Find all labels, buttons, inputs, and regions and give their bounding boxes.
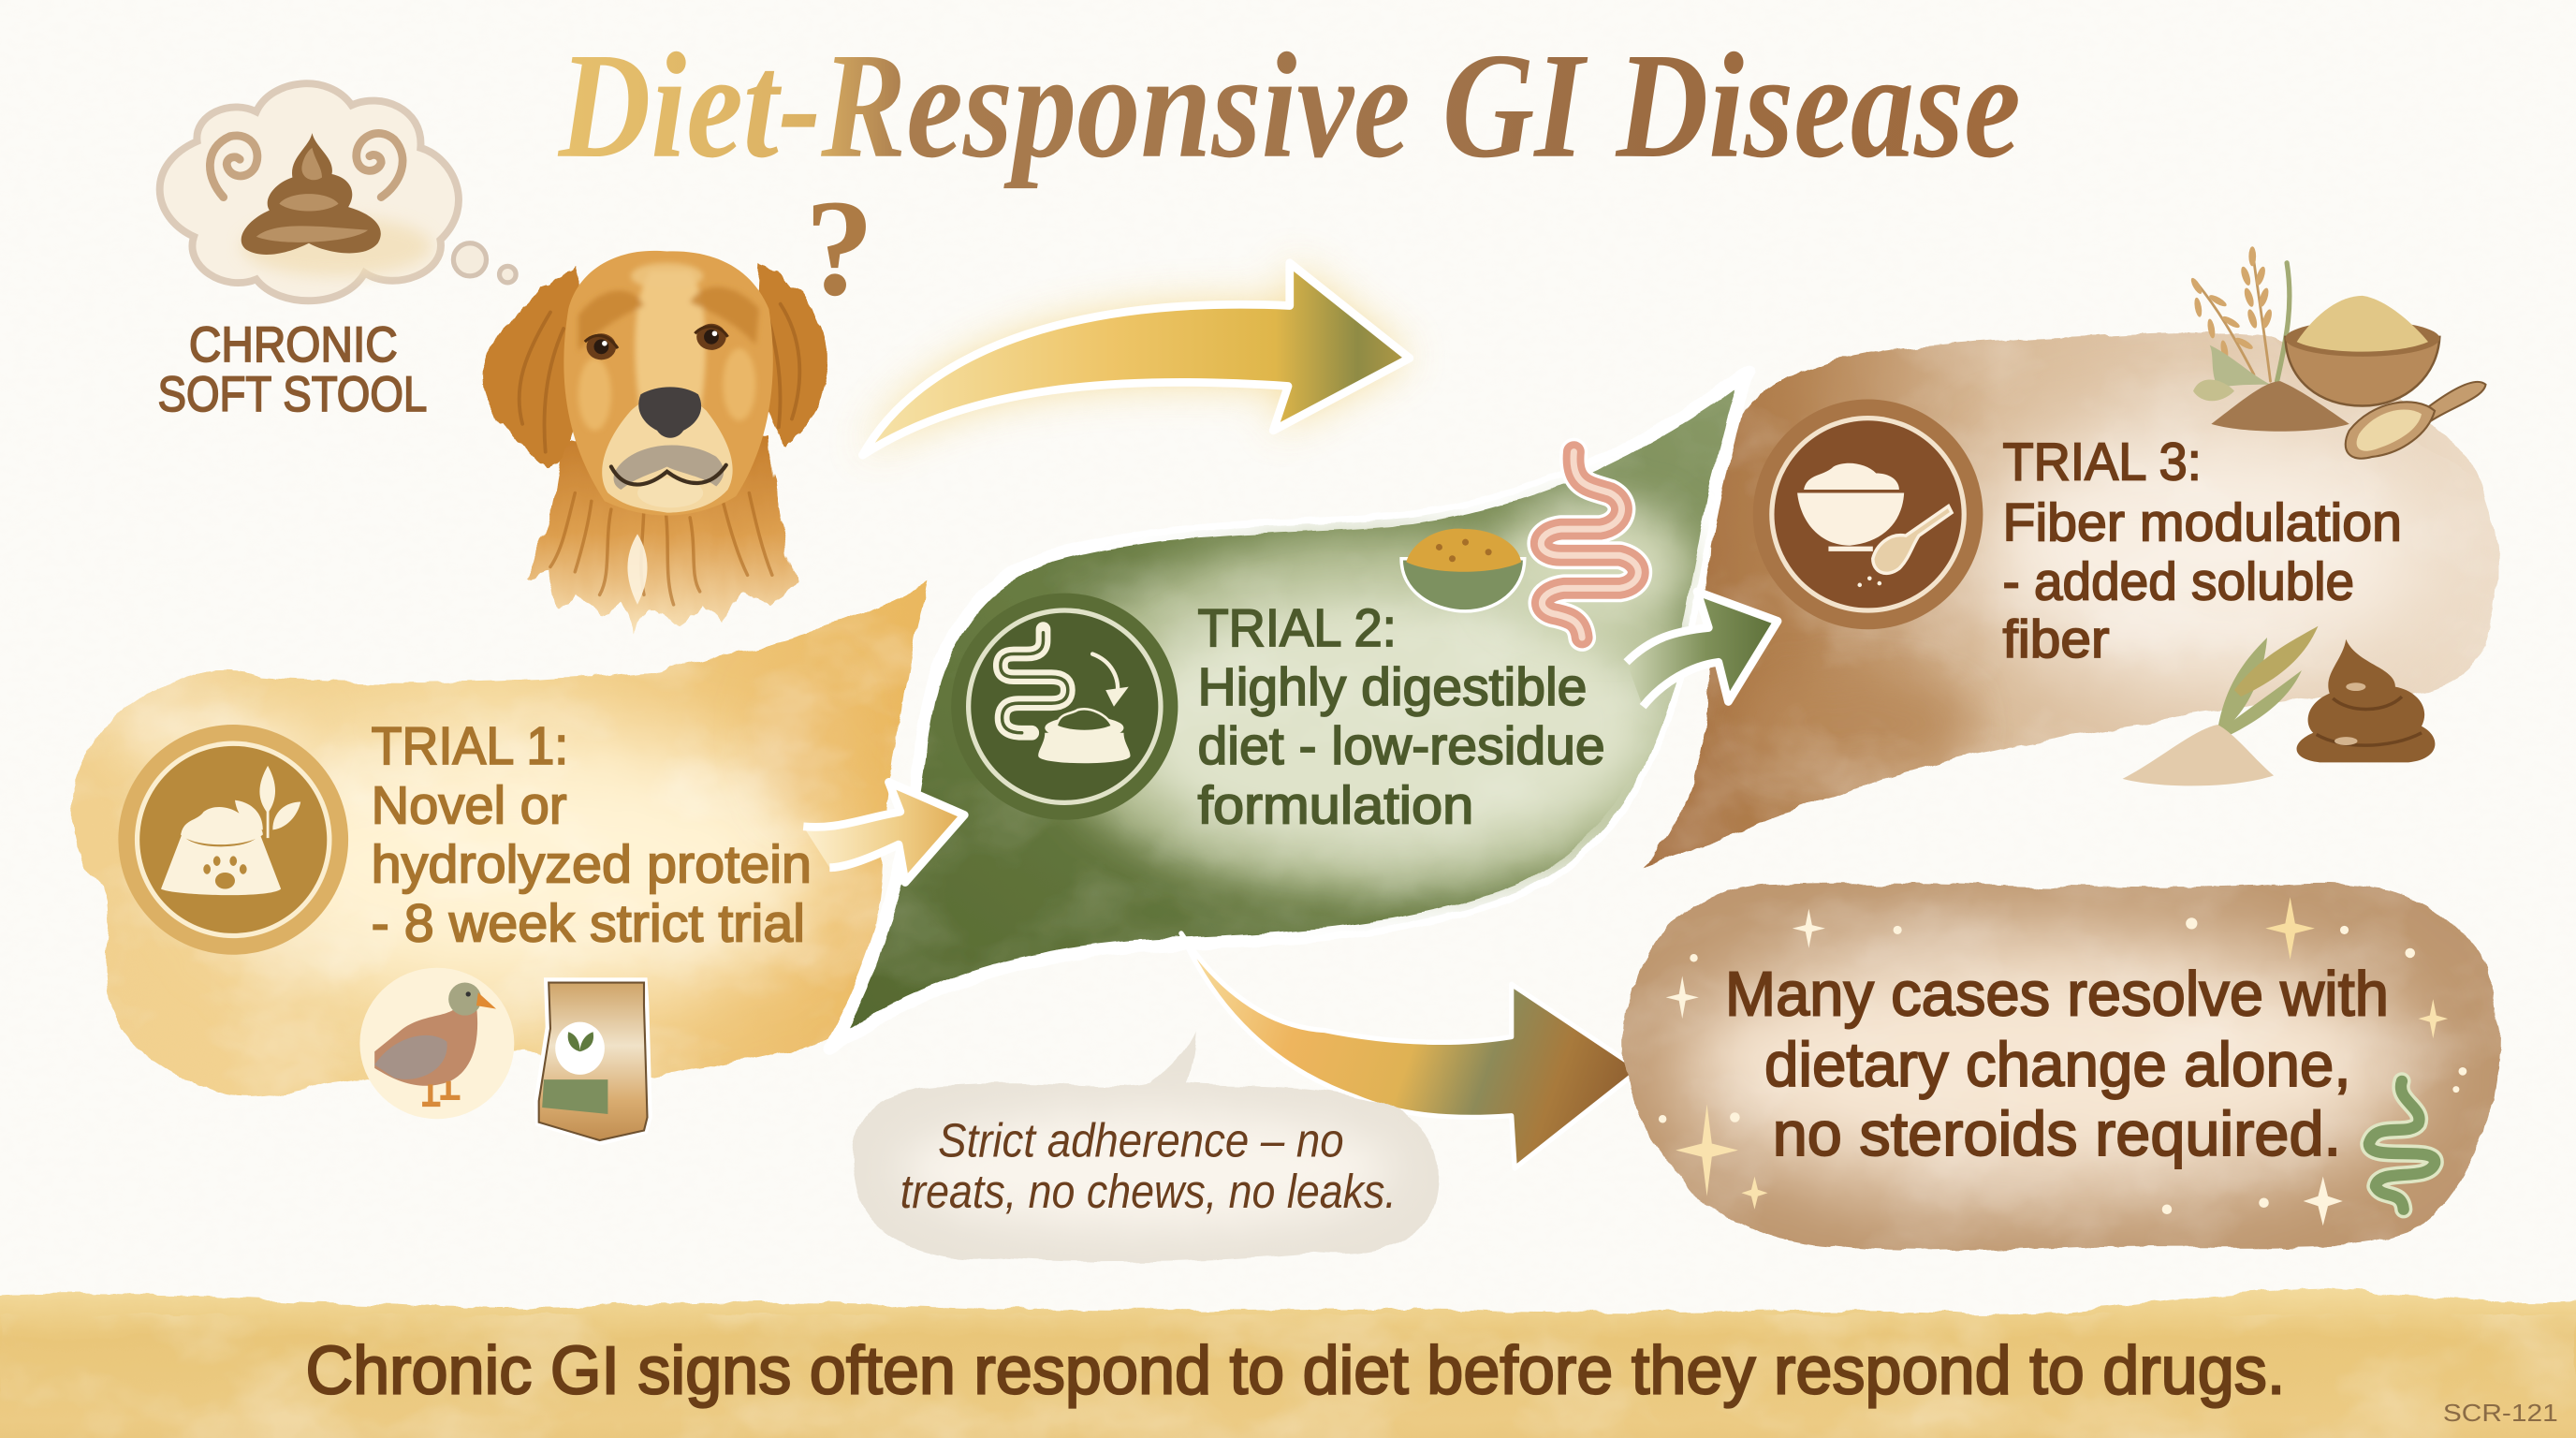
trial 1 wash [66,575,953,1117]
trial 2 wash [822,370,1758,1051]
icon: leaves [2217,626,2318,736]
panel: result [1610,871,2513,1265]
cloud wash [242,217,432,276]
icon: brown fiber pile [2211,381,2349,432]
result text: Many cases resolve with [1725,961,2389,1030]
trial 2 badge [951,594,1178,820]
mouth [611,465,726,485]
ear strokes [520,304,799,452]
trial 1 text: hydrolyzed protein [372,834,812,893]
trial 1 text [372,716,812,953]
chest strokes [550,493,772,605]
icon: duck [359,968,514,1119]
result wash [1610,871,2513,1265]
head [564,251,773,516]
muzzle [602,396,733,513]
icon: stool [2297,639,2435,762]
cloud shape [160,83,459,301]
trial 2 text [1197,598,1605,834]
arrow: trial 1 to trial 2 [803,782,964,882]
source code: SCR-121 [2443,1399,2558,1427]
chest fur [524,435,795,633]
left ear [481,266,581,470]
trial 1 text: TRIAL 1: [372,716,568,775]
label: chronic soft stool: SOFT STOOL [157,367,427,422]
trial 3 text [2002,432,2402,668]
icon: light fiber pile [2123,725,2274,785]
banner wash [0,1290,2576,1438]
note bubble [853,1030,1439,1262]
trial 3 badge [1753,399,1983,629]
banner [0,1290,2576,1438]
arrow: to result [1181,933,1640,1168]
result text: no steroids required. [1773,1100,2341,1169]
trial 1 text: - 8 week strict trial [372,894,805,953]
trial 2 text: Highly digestible [1197,657,1587,716]
sparkles [1659,897,2466,1225]
chin [637,478,703,507]
icon: wheat and grass [2189,246,2290,401]
eyes [585,324,728,360]
icon: intestine and bowl [1001,629,1131,763]
note text: Strict adherence – no [938,1114,1344,1167]
trial 2 text: formulation [1197,775,1473,834]
icon: bowl with paw and plant [161,766,300,895]
trial 3 wash [1627,312,2513,888]
right ear [755,263,828,446]
icon: bowl and scoop [1797,463,1952,587]
panel: trial 2 [822,370,1758,1051]
result text: dietary change alone, [1764,1031,2351,1100]
result text [1725,961,2389,1169]
trial 2 text: TRIAL 2: [1197,598,1397,657]
stink swirls [210,133,402,198]
banner text: Chronic GI signs often respond to diet before they respond to drugs. [305,1333,2285,1408]
trial 3 text: TRIAL 3: [2002,432,2202,491]
bubble shape [853,1030,1439,1262]
icon: healthy intestine [2369,1081,2435,1210]
face light patches [578,263,759,431]
curved arrow: top [862,263,1410,455]
thought bubbles [453,243,516,283]
stool icon [242,133,381,255]
icon: fiber bowl [2285,296,2439,406]
note text: treats, no chews, no leaks. [900,1165,1397,1218]
dog illustration [481,251,828,633]
trial 2 text: diet - low-residue [1197,716,1605,775]
trial 1 badge [118,725,348,955]
icon: digestible food bowl [1401,529,1525,611]
trial 3 text: - added soluble [2002,552,2354,611]
title: Diet-Responsive GI Disease [557,22,2021,189]
question mark: ? [805,171,874,324]
label: chronic soft stool: CHRONIC [189,317,398,373]
arrow: trial 2 to trial 3 [1627,592,1778,707]
thought cloud: chronic soft stool [160,83,459,301]
panel: trial 1 [66,575,953,1145]
trial 3 text: Fiber modulation [2002,492,2402,551]
note text [900,1114,1397,1218]
white chest patch [627,534,648,605]
trial 1 text: Novel or [372,775,567,834]
icon: wooden scoop [2346,382,2485,459]
icon: food bag [534,977,652,1145]
nose [638,387,701,438]
icon: intestine [1541,452,1638,638]
label: chronic soft stool [157,317,427,422]
trial 3 text: fiber [2002,609,2110,668]
mouth shadow [614,446,724,490]
